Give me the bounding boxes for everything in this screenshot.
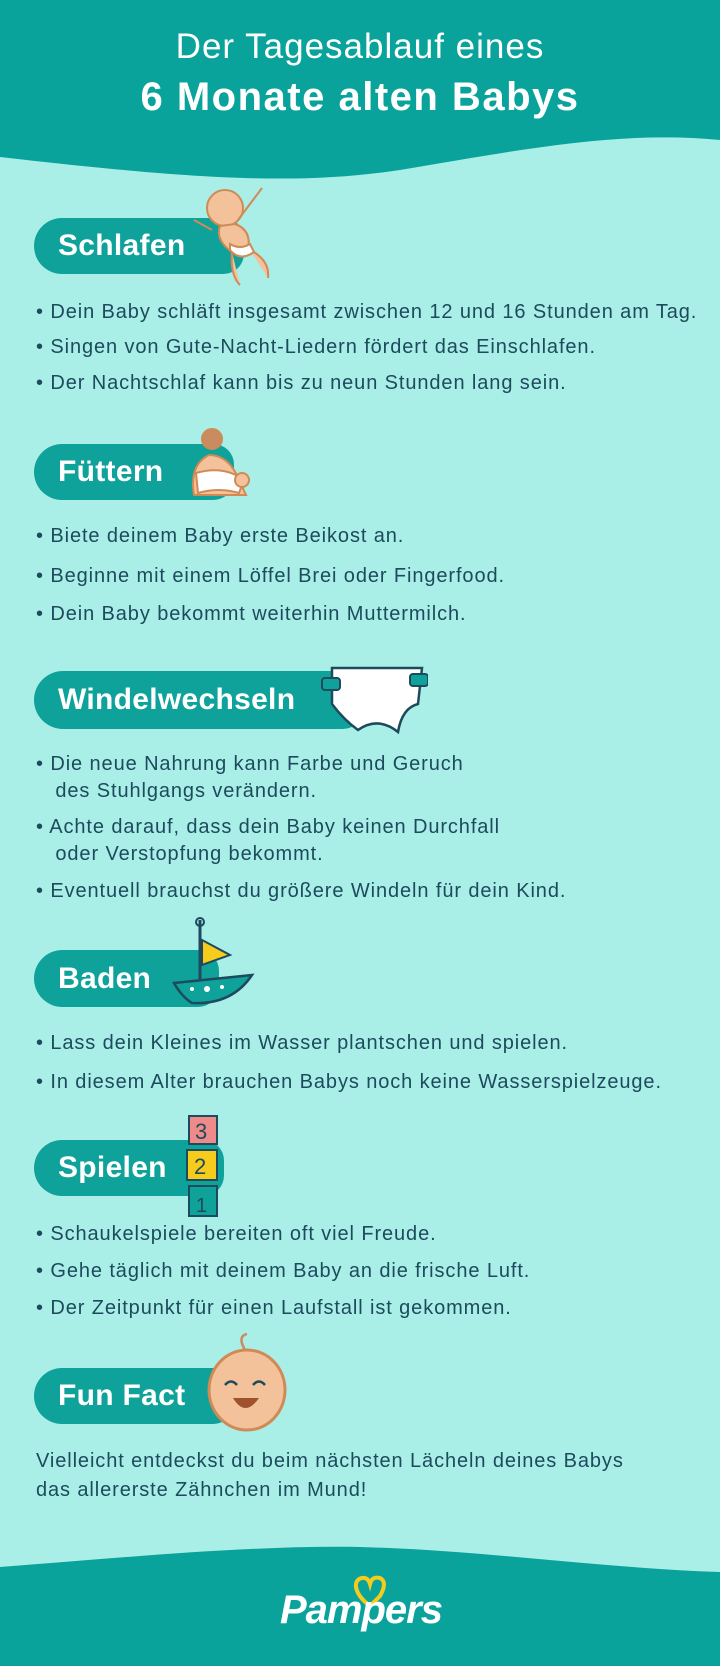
panel: Baden heading: Baden bbox=[58, 962, 151, 994]
text: Füttern bullets bbox=[36, 525, 505, 625]
panel: Schlafen heading: Schlafen bbox=[58, 229, 185, 262]
logo: Pampers: Pampers bbox=[280, 1588, 442, 1632]
text: Windelwechseln bullets: • Die neue Nahrung kann Farbe und Geruch bbox=[36, 753, 464, 775]
text: Windelwechseln bullets bbox=[36, 753, 566, 902]
panel: Spielen heading: Spielen bbox=[58, 1151, 167, 1184]
icon: boat bbox=[172, 917, 254, 1004]
icon: blocks: 3 bbox=[195, 1119, 207, 1144]
text: fun fact: Vielleicht entdeckst du beim nächsten Lächeln deines Babys bbox=[36, 1450, 624, 1472]
panel: Füttern heading: Füttern bbox=[58, 455, 163, 488]
panel: Windelwechseln heading: Windelwechseln bbox=[58, 683, 295, 716]
text: Baden bullets: • In diesem Alter brauchen Babys noch keine Wasserspielzeuge. bbox=[36, 1071, 662, 1093]
panel: Schlafen heading bbox=[34, 218, 244, 274]
text: Windelwechseln bullets: oder Verstopfung bekommt. bbox=[55, 843, 324, 865]
text: fun fact: das allererste Zähnchen im Mund! bbox=[36, 1479, 367, 1501]
text: fun fact bbox=[36, 1450, 624, 1501]
text: Spielen bullets: • Gehe täglich mit deinem Baby an die frische Luft. bbox=[36, 1260, 530, 1282]
panel: Fun Fact heading bbox=[34, 1368, 234, 1424]
panel: Windelwechseln heading bbox=[34, 671, 364, 729]
panel: Fun Fact heading: Fun Fact bbox=[58, 1379, 185, 1412]
header wave background bbox=[0, 0, 720, 178]
text: Füttern bullets: • Biete deinem Baby erste Beikost an. bbox=[36, 525, 404, 547]
text: Windelwechseln bullets: des Stuhlgangs verändern. bbox=[55, 780, 317, 802]
text: Schlafen bullets: • Dein Baby schläft insgesamt zwischen 12 und 16 Stunden am Tag. bbox=[36, 301, 697, 323]
icon: feeding mother bbox=[192, 428, 250, 496]
footer wave bbox=[0, 1546, 720, 1666]
text: Spielen bullets: • Der Zeitpunkt für einen Laufstall ist gekommen. bbox=[36, 1297, 512, 1319]
text: Füttern bullets: • Dein Baby bekommt weiterhin Muttermilch. bbox=[36, 603, 466, 625]
text: Schlafen bullets: • Singen von Gute-Nacht-Liedern fördert das Einschlafen. bbox=[36, 336, 596, 358]
text: Schlafen bullets bbox=[36, 301, 697, 394]
icon: diaper bbox=[321, 666, 428, 734]
title bbox=[140, 27, 580, 119]
panel: Baden heading bbox=[34, 950, 219, 1007]
icon: blocks: 2 bbox=[194, 1154, 206, 1179]
title: Der Tagesablauf eines bbox=[176, 27, 544, 66]
text: Windelwechseln bullets: • Achte darauf, dass dein Baby keinen Durchfall bbox=[36, 816, 500, 838]
icon: smiling baby face bbox=[208, 1332, 286, 1432]
text: Baden bullets: • Lass dein Kleines im Wasser plantschen und spielen. bbox=[36, 1032, 568, 1054]
text: Spielen bullets bbox=[36, 1223, 530, 1319]
icon: sleeping baby bbox=[194, 187, 270, 286]
panel: Spielen heading bbox=[34, 1140, 224, 1196]
icon: blocks bbox=[186, 1115, 218, 1217]
text: Schlafen bullets: • Der Nachtschlaf kann bis zu neun Stunden lang sein. bbox=[36, 372, 567, 394]
title: 6 Monate alten Babys bbox=[140, 75, 580, 119]
text: Spielen bullets: • Schaukelspiele bereiten oft viel Freude. bbox=[36, 1223, 437, 1245]
icon: blocks: 1 bbox=[196, 1195, 207, 1217]
text: Baden bullets bbox=[36, 1032, 662, 1093]
text: Füttern bullets: • Beginne mit einem Löffel Brei oder Fingerfood. bbox=[36, 565, 505, 587]
panel: Füttern heading bbox=[34, 444, 234, 500]
text: Windelwechseln bullets: • Eventuell brauchst du größere Windeln für dein Kind. bbox=[36, 880, 566, 902]
